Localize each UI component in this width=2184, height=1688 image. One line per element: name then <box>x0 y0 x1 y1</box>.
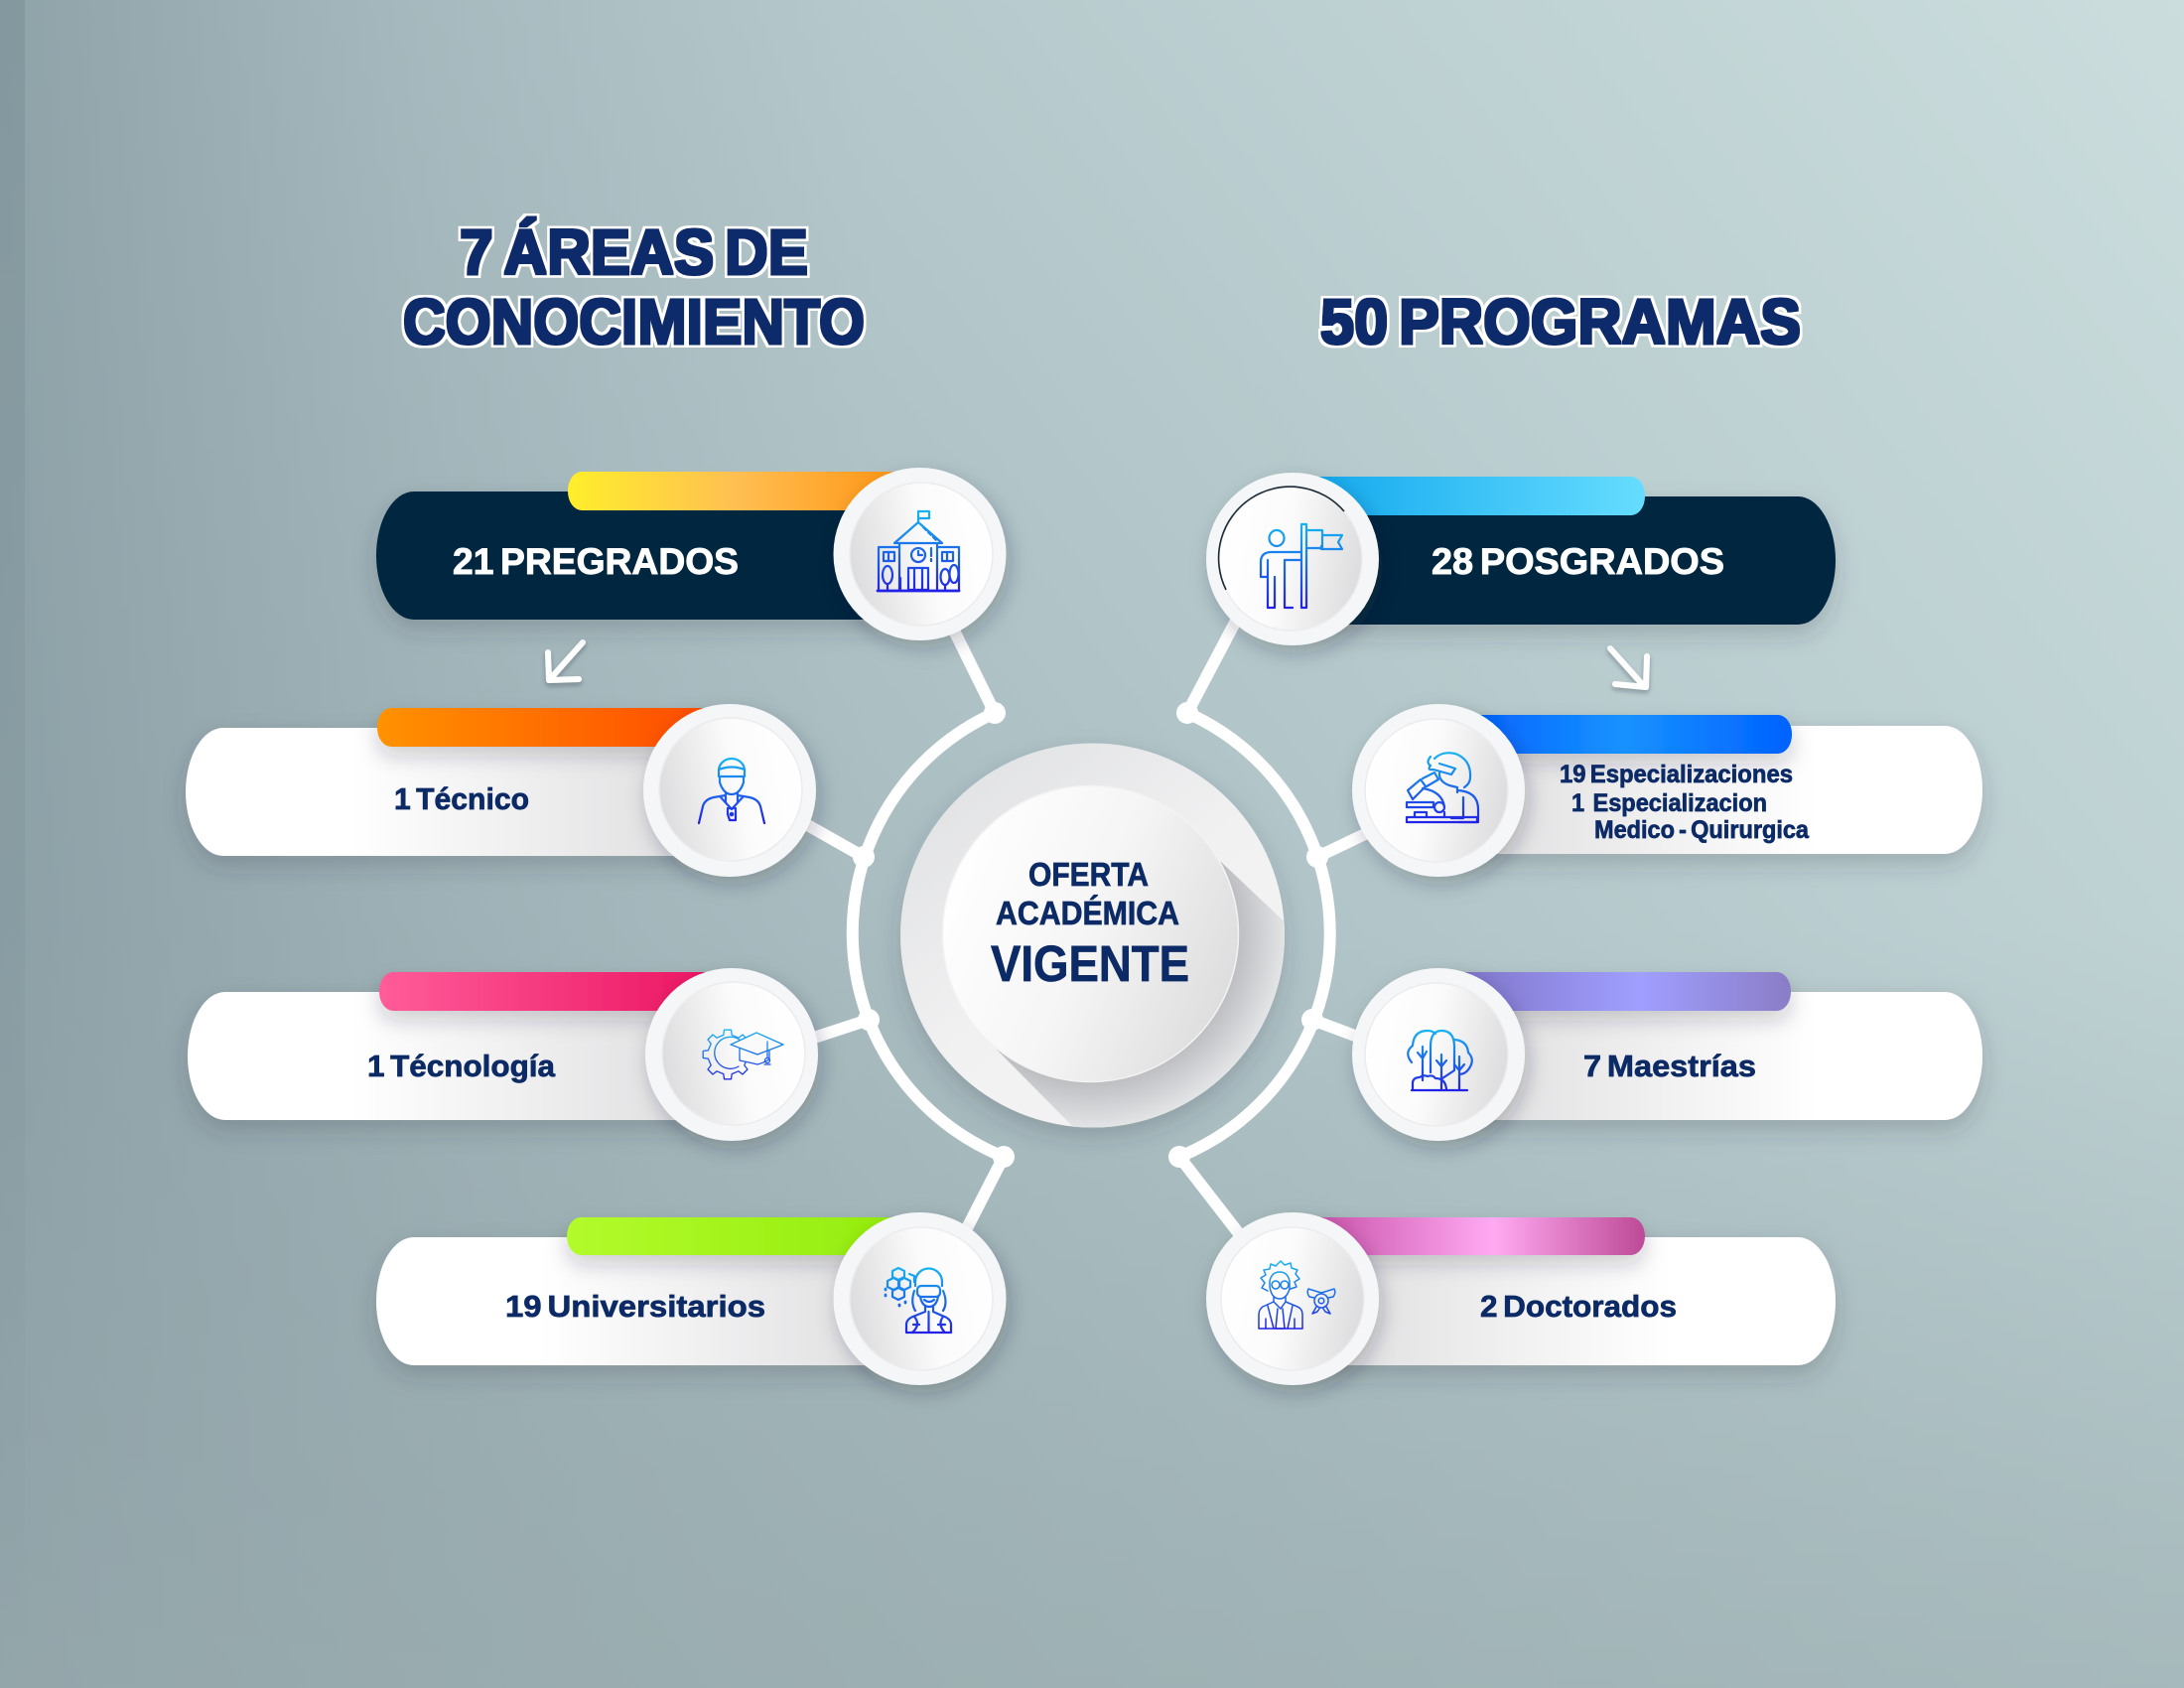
panel: 28 posgrados: 28 POSGRADOS <box>1432 541 1724 582</box>
panel: 19 universitarios <box>376 1212 1007 1385</box>
arrow: pregrados <box>548 642 583 680</box>
icon: trees <box>1408 1031 1472 1090</box>
panel: 28 posgrados <box>1206 473 1836 645</box>
icon: person with flag <box>1261 524 1342 608</box>
panel: 1 técnico: 1 Técnico <box>394 781 529 816</box>
center disc: oferta académica vigente: ACADÉMICA <box>996 895 1179 931</box>
panel: 1 técnico <box>186 704 816 877</box>
panel: especializaciones <box>1352 704 1982 877</box>
panel: 21 pregrados <box>376 468 1007 640</box>
icon: woman with goggles and hexagons <box>886 1268 951 1333</box>
panel: 1 tecnología: 1 Técnología <box>367 1049 556 1083</box>
center disc: oferta académica vigente <box>891 743 1294 1147</box>
text block: especializaciones: 19 Especializaciones <box>1560 761 1793 788</box>
center disc: oferta académica vigente: VIGENTE <box>991 935 1189 992</box>
arrow: posgrados <box>1610 648 1647 687</box>
text block: especializaciones <box>1560 761 1810 844</box>
panel: 21 pregrados: 21 PREGRADOS <box>453 541 739 582</box>
heading: 7 áreas de conocimiento: 7 ÁREAS DE <box>460 216 808 288</box>
icon: gear and graduation cap <box>703 1030 783 1079</box>
panel: 2 doctorados: 2 Doctorados <box>1480 1289 1677 1324</box>
panel: 19 universitarios: 19 Universitarios <box>505 1289 765 1324</box>
panel: 1 tecnología <box>188 968 818 1141</box>
center disc: oferta académica vigente: OFERTA <box>1028 856 1149 893</box>
icon: coach with whistle <box>699 759 764 823</box>
icon: researcher at microscope <box>1407 753 1478 822</box>
connector ring and branches <box>804 621 1365 1236</box>
icon: professor with medal <box>1259 1261 1335 1329</box>
panel: 7 maestrías <box>1352 968 1982 1141</box>
heading: 50 programas: 50 PROGRAMAS <box>1320 286 1801 357</box>
heading: 7 áreas de conocimiento <box>403 216 865 357</box>
heading: 7 áreas de conocimiento: CONOCIMIENTO <box>403 286 865 357</box>
panel: 2 doctorados <box>1206 1212 1836 1385</box>
text block: especializaciones: 1 Especializacion <box>1571 789 1767 817</box>
panel: 7 maestrías: 7 Maestrías <box>1583 1049 1756 1083</box>
icon: school building <box>878 511 959 591</box>
text block: especializaciones: Medico - Quirurgica <box>1594 816 1810 844</box>
